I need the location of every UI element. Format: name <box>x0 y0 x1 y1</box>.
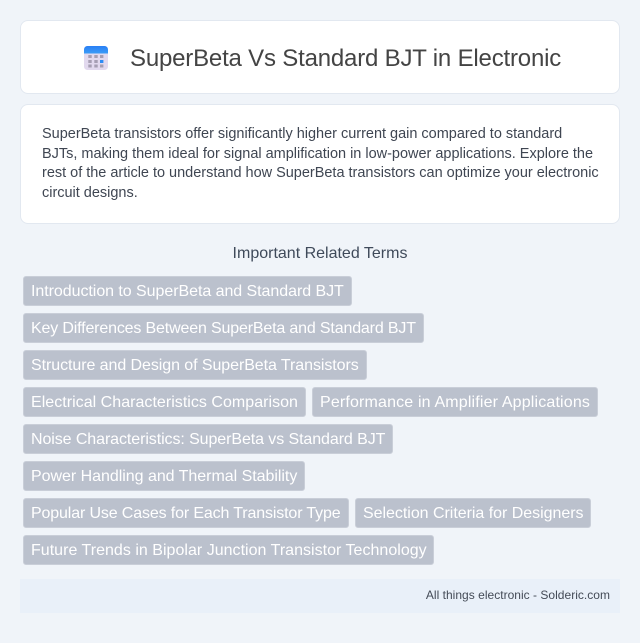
icon: calendar <box>84 46 108 70</box>
tag: Noise Characteristics: SuperBeta vs Standard BJT <box>31 431 385 448</box>
title: SuperBeta Vs Standard BJT in Electronic <box>130 45 561 72</box>
intro paragraph: BJTs, making them ideal for signal amplification in low-power applications. Explore the <box>42 146 593 162</box>
tag: Selection Criteria for Designers <box>363 505 583 522</box>
tag: Power Handling and Thermal Stability <box>31 468 297 485</box>
tag: Introduction to SuperBeta and Standard BJT <box>31 283 344 300</box>
intro paragraph: rest of the article to understand how SuperBeta transistors can optimize your electronic <box>42 165 599 181</box>
tag <box>23 313 424 343</box>
tag <box>23 276 352 306</box>
tag: Performance in Amplifier Applications <box>320 394 590 411</box>
intro text panel <box>20 104 620 224</box>
tag <box>355 498 591 528</box>
footer text: All things electronic - Solderic.com <box>426 588 610 602</box>
section heading: Important Related Terms <box>233 245 407 262</box>
tag: Future Trends in Bipolar Junction Transistor Technology <box>31 542 427 559</box>
header panel <box>20 20 620 94</box>
intro paragraph <box>42 126 599 200</box>
footer bar <box>20 579 620 613</box>
tag <box>312 387 598 417</box>
tag: Key Differences Between SuperBeta and Standard BJT <box>31 320 416 337</box>
tag: Popular Use Cases for Each Transistor Type <box>31 505 341 522</box>
tag <box>23 387 306 417</box>
tag: Electrical Characteristics Comparison <box>31 394 298 411</box>
tag <box>23 535 434 565</box>
tag: Structure and Design of SuperBeta Transistors <box>31 357 359 374</box>
tag <box>23 424 393 454</box>
tag <box>23 498 349 528</box>
tag <box>23 461 305 491</box>
tag <box>23 350 367 380</box>
tag list <box>23 276 598 565</box>
intro paragraph: circuit designs. <box>42 184 138 200</box>
intro paragraph: SuperBeta transistors offer significantly higher current gain compared to standard <box>42 126 562 142</box>
